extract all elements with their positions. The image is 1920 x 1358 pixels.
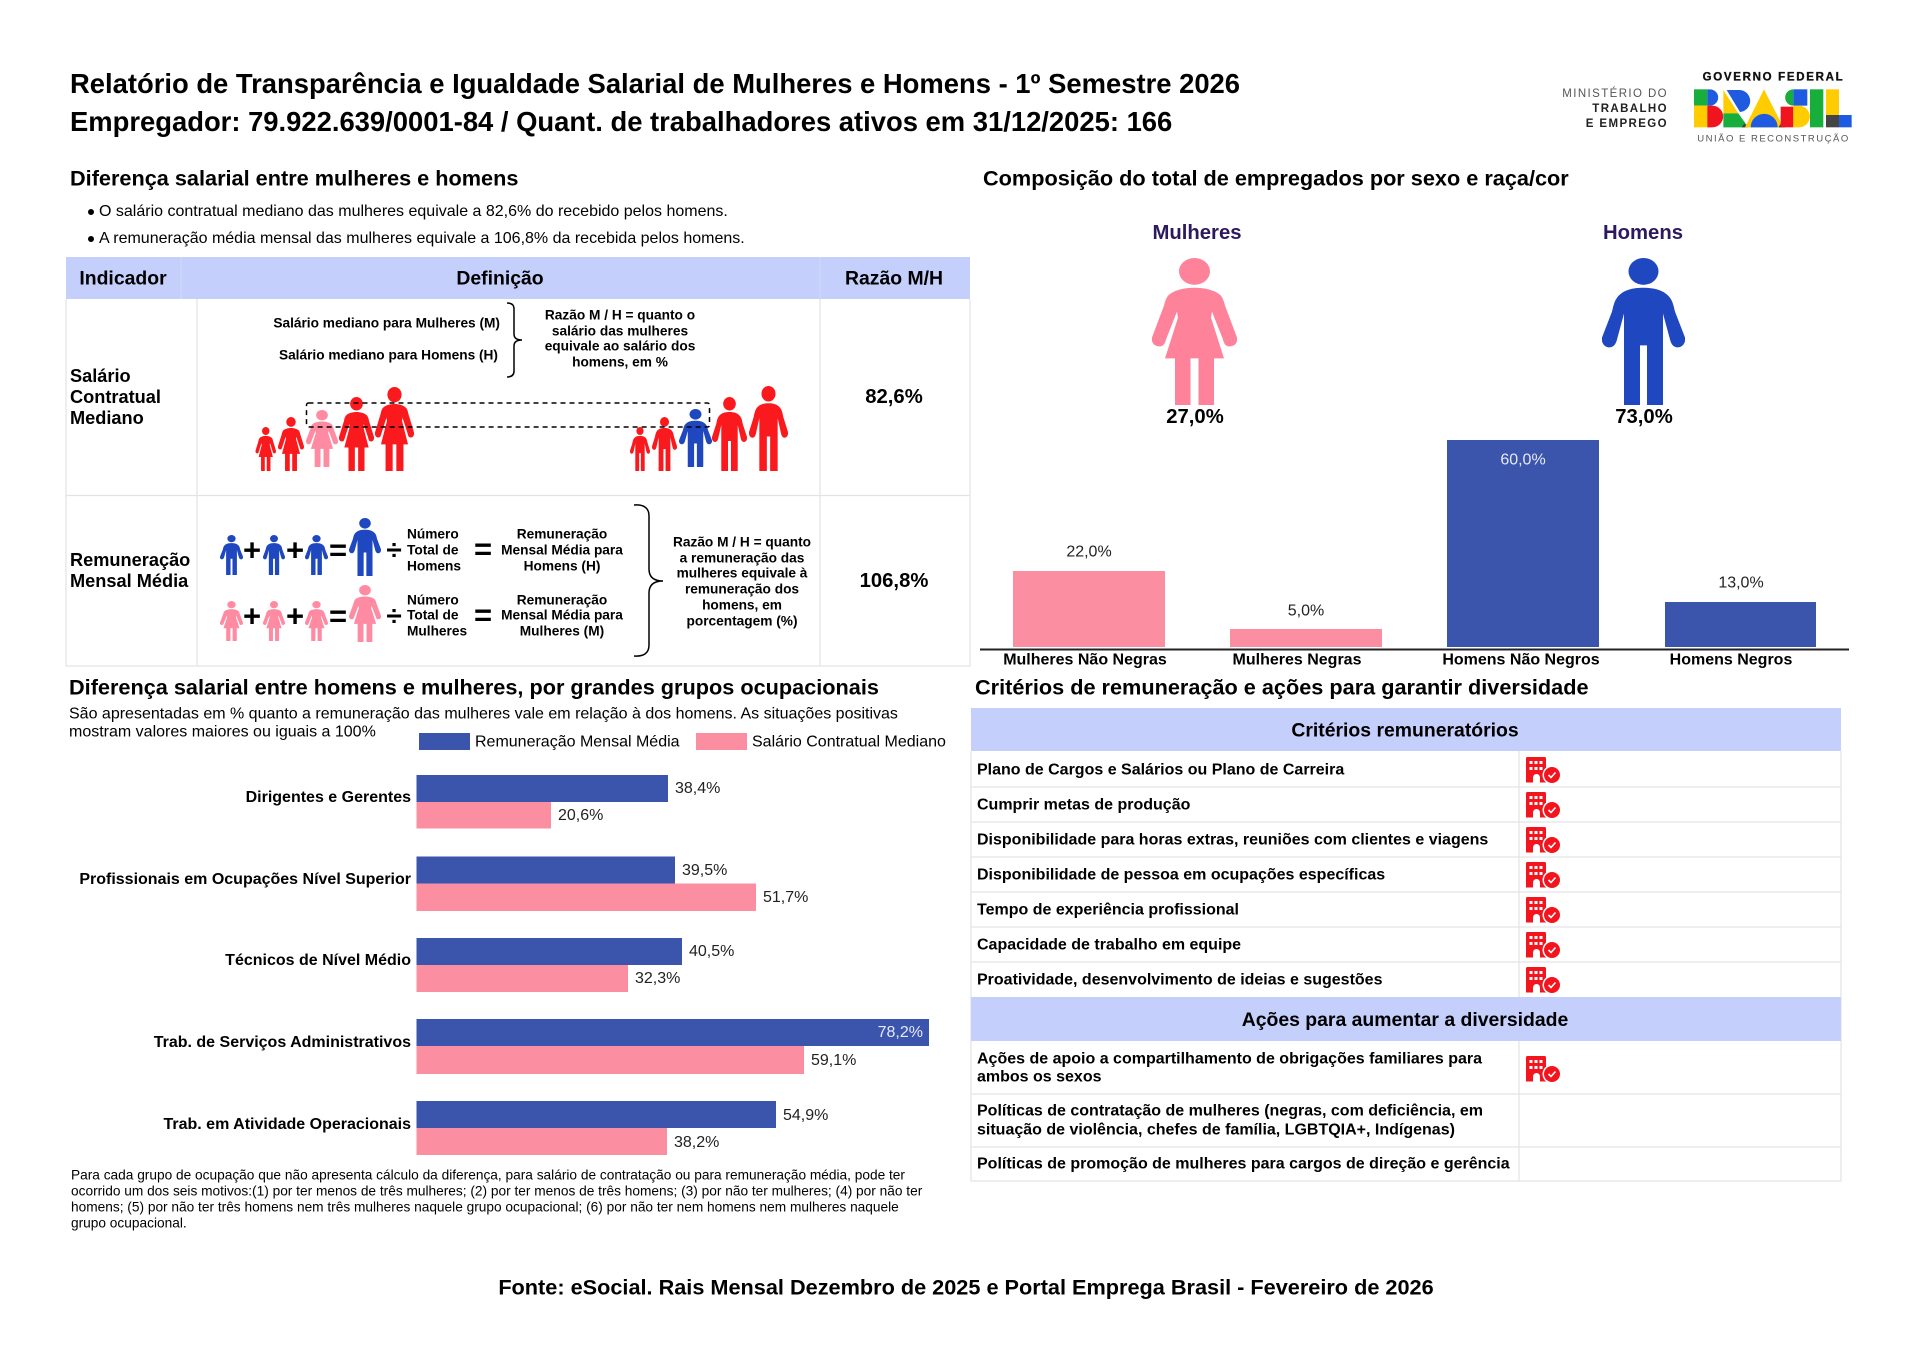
row: remuneração mensal média: Remuneração bbox=[517, 526, 607, 542]
row: salário contratual mediano: Salário mediano para Homens (H) bbox=[279, 348, 498, 362]
group: técnicos: 32,3% bbox=[635, 970, 680, 987]
title bbox=[70, 68, 1240, 137]
group: profissionais: 51,7% bbox=[763, 889, 808, 906]
bullet list: A remuneração média mensal das mulheres equivale a 106,8% da recebida pelos homens. bbox=[99, 230, 745, 247]
icon group: homens: 73,0% bbox=[1615, 406, 1673, 428]
row: remuneração mensal média: Mensal Média para bbox=[501, 608, 623, 622]
row: remuneração mensal média: ÷ bbox=[386, 534, 402, 566]
row: remuneração mensal média: Total de bbox=[407, 542, 459, 558]
row: salário contratual mediano bbox=[70, 303, 923, 471]
panel: tabela de indicadores bbox=[66, 257, 970, 666]
legend: Salário Contratual Mediano bbox=[752, 734, 946, 750]
row: remuneração mensal média: Número bbox=[407, 526, 459, 542]
bar chart: composição por sexo e raça: Mulheres Não Negras bbox=[1003, 652, 1167, 668]
icon group: homens: Homens bbox=[1603, 222, 1683, 244]
heading: diferença salarial: Diferença salarial entre mulheres e homens bbox=[70, 166, 518, 190]
ministry name bbox=[1562, 87, 1668, 130]
ministry name: E EMPREGO bbox=[1586, 118, 1668, 130]
bar chart: composição por sexo e raça: 60,0% bbox=[1500, 452, 1546, 468]
row: remuneração mensal média: Mulheres (M) bbox=[520, 624, 604, 638]
row: remuneração mensal média: mulheres equivale à bbox=[677, 566, 808, 580]
footnote: ocorrido um dos seis motivos:(1) por ter menos de três mulheres; (2) por ter menos de três homens; (3) por não ter mulheres; (4) por não ter bbox=[71, 1184, 923, 1198]
women row icons bbox=[255, 387, 414, 471]
bullet list: O salário contratual mediano das mulheres equivale a 82,6% do recebido pelos homens. bbox=[99, 203, 728, 220]
bar chart: composição por sexo e raça: Homens Não Negros bbox=[1442, 652, 1600, 668]
men row icons bbox=[630, 386, 788, 471]
row: remuneração mensal média: porcentagem (%) bbox=[686, 614, 798, 628]
legend bbox=[419, 733, 946, 750]
row: salário contratual mediano: Salário mediano para Mulheres (M) bbox=[273, 316, 500, 330]
row: Capacidade de trabalho em equipe bbox=[977, 936, 1241, 954]
heading: composição: Composição do total de empregados por sexo e raça/cor bbox=[983, 166, 1569, 190]
row bbox=[977, 1102, 1483, 1138]
group: atividade operacional: 54,9% bbox=[783, 1107, 828, 1124]
row bbox=[977, 1050, 1562, 1086]
row bbox=[977, 757, 1562, 784]
row: remuneração mensal média: + bbox=[286, 598, 304, 634]
bar chart: composição por sexo e raça: 22,0% bbox=[1066, 544, 1112, 560]
row bbox=[977, 897, 1562, 924]
row: remuneração mensal média bbox=[70, 505, 928, 656]
row bbox=[977, 967, 1562, 994]
row: remuneração mensal média: remuneração dos bbox=[685, 582, 799, 596]
section header: critérios remuneratórios bbox=[971, 708, 1841, 751]
row: remuneração mensal média: Remuneração bbox=[70, 550, 190, 570]
row: remuneração mensal média: Homens (H) bbox=[524, 558, 600, 574]
row: remuneração mensal média: = bbox=[474, 532, 492, 566]
table header: Definição bbox=[456, 268, 544, 290]
footnote: homens; (5) por não ter três homens nem três mulheres naquele grupo ocupacional; (6) por não ter nem homens nem mulheres naquele bbox=[71, 1200, 899, 1214]
icon group: mulheres: 27,0% bbox=[1166, 406, 1224, 428]
row bbox=[977, 792, 1562, 820]
group: técnicos: 40,5% bbox=[689, 943, 734, 960]
row bbox=[977, 932, 1562, 960]
heading: diferença por grupos ocupacionais: Diferença salarial entre homens e mulheres, por grandes grupos ocupacionais bbox=[69, 674, 879, 700]
row: remuneração mensal média: Mensal Média bbox=[70, 571, 189, 591]
footnote: grupo ocupacional. bbox=[71, 1216, 187, 1230]
row bbox=[977, 862, 1562, 890]
group: técnicos: Técnicos de Nível Médio bbox=[225, 952, 411, 969]
heading: critérios e ações: Critérios de remuneração e ações para garantir diversidade bbox=[975, 674, 1589, 700]
row: remuneração mensal média: homens, em bbox=[702, 598, 782, 612]
row: remuneração mensal média: + bbox=[243, 532, 261, 568]
group: profissionais: Profissionais em Ocupações Nível Superior bbox=[79, 871, 411, 888]
icon group: mulheres: Mulheres bbox=[1152, 222, 1242, 244]
row: Cumprir metas de produção bbox=[977, 796, 1191, 814]
icon group: homens bbox=[1602, 222, 1685, 428]
section header: ações: Ações para aumentar a diversidade bbox=[1242, 1009, 1568, 1031]
row: remuneração mensal média: Número bbox=[407, 592, 459, 608]
table header bbox=[66, 257, 970, 299]
group: dirigentes e gerentes: Dirigentes e Gerentes bbox=[246, 789, 411, 806]
bar chart: composição por sexo e raça: 13,0% bbox=[1718, 574, 1764, 592]
governo federal label: GOVERNO FEDERAL bbox=[1703, 72, 1844, 84]
row bbox=[977, 827, 1562, 854]
ministry name: MINISTÉRIO DO bbox=[1562, 87, 1668, 100]
row: salário contratual mediano: Contratual bbox=[70, 387, 161, 407]
row: Políticas de promoção de mulheres para cargos de direção e gerência bbox=[977, 1156, 1510, 1172]
row: Proatividade, desenvolvimento de ideias e sugestões bbox=[977, 972, 1383, 988]
row: salário contratual mediano: Mediano bbox=[70, 408, 144, 428]
title: Relatório de Transparência e Igualdade Salarial de Mulheres e Homens - 1º Semestre 2026 bbox=[70, 68, 1240, 99]
men formula bbox=[220, 518, 381, 576]
row: remuneração mensal média: 106,8% bbox=[860, 570, 928, 592]
row: remuneração mensal média: a remuneração das bbox=[680, 550, 805, 566]
intro text: São apresentadas em % quanto a remuneração das mulheres vale em relação à dos homens. As situações positivas bbox=[69, 706, 898, 722]
row: remuneração mensal média: Mulheres bbox=[407, 624, 467, 638]
row: Tempo de experiência profissional bbox=[977, 902, 1239, 918]
row: Políticas de contratação de mulheres (negras, com deficiência, em bbox=[977, 1102, 1483, 1120]
row: remuneração mensal média: + bbox=[286, 532, 304, 568]
group: atividade operacional: 38,2% bbox=[674, 1134, 719, 1151]
group: serviços administrativos: Trab. de Serviços Administrativos bbox=[154, 1034, 411, 1051]
row: remuneração mensal média: = bbox=[329, 598, 347, 634]
row: salário contratual mediano: Salário bbox=[70, 366, 131, 386]
brasil wordmark bbox=[1694, 89, 1852, 127]
panel: critérios e ações table bbox=[971, 708, 1841, 1181]
group: atividade operacional bbox=[164, 1101, 828, 1155]
row: situação de violência, chefes de família, LGBTQIA+, Indígenas) bbox=[977, 1122, 1455, 1138]
row: remuneração mensal média: Remuneração bbox=[517, 592, 607, 608]
row: remuneração mensal média: Razão M / H = quanto bbox=[673, 534, 811, 550]
row: Plano de Cargos e Salários ou Plano de Carreira bbox=[977, 762, 1344, 778]
bar chart: composição por sexo e raça: Mulheres Negras bbox=[1233, 652, 1362, 668]
row: remuneração mensal média: = bbox=[329, 532, 347, 568]
bar chart: composição por sexo e raça bbox=[980, 440, 1849, 668]
row: salário contratual mediano: salário das mulheres bbox=[552, 324, 688, 338]
row: Disponibilidade de pessoa em ocupações específicas bbox=[977, 866, 1385, 884]
ministry name: TRABALHO bbox=[1592, 103, 1668, 115]
group: técnicos bbox=[225, 938, 734, 992]
row: remuneração mensal média: Total de bbox=[407, 608, 459, 622]
legend: Remuneração Mensal Média bbox=[475, 734, 680, 750]
group: serviços administrativos bbox=[154, 1019, 929, 1074]
women formula bbox=[220, 585, 381, 642]
table header: Indicador bbox=[79, 268, 167, 290]
intro text bbox=[69, 706, 898, 740]
row: salário contratual mediano: 82,6% bbox=[865, 386, 923, 408]
row: salário contratual mediano: Razão M / H = quanto o bbox=[545, 308, 695, 322]
group: dirigentes e gerentes: 38,4% bbox=[675, 780, 720, 797]
source: Fonte: eSocial. Rais Mensal Dezembro de 2025 e Portal Emprega Brasil - Fevereiro de 2026 bbox=[498, 1274, 1434, 1300]
section header: critérios remuneratórios: Critérios remuneratórios bbox=[1291, 720, 1519, 742]
group: serviços administrativos: 59,1% bbox=[811, 1052, 856, 1069]
icon group: mulheres bbox=[1152, 222, 1242, 428]
row: remuneração mensal média: Mensal Média para bbox=[501, 542, 623, 558]
intro text: mostram valores maiores ou iguais a 100% bbox=[69, 724, 376, 740]
title: Empregador: 79.922.639/0001-84 / Quant. de trabalhadores ativos em 31/12/2025: 166 bbox=[70, 106, 1172, 137]
row: remuneração mensal média: ÷ bbox=[386, 600, 402, 632]
table header: Razão M/H bbox=[845, 268, 943, 290]
row: remuneração mensal média: + bbox=[243, 598, 261, 634]
group: dirigentes e gerentes: 20,6% bbox=[558, 807, 603, 824]
bar chart: grupos ocupacionais bbox=[79, 775, 929, 1155]
bar chart: composição por sexo e raça: 5,0% bbox=[1288, 602, 1324, 620]
group: profissionais: 39,5% bbox=[682, 862, 727, 879]
bullet list bbox=[88, 203, 745, 247]
row: salário contratual mediano: equivale ao salário dos bbox=[545, 338, 696, 354]
group: atividade operacional: Trab. em Atividade Operacionais bbox=[164, 1116, 411, 1133]
row: Disponibilidade para horas extras, reuniões com clientes e viagens bbox=[977, 832, 1488, 848]
group: profissionais bbox=[79, 856, 808, 911]
group: dirigentes e gerentes bbox=[246, 775, 720, 828]
row: ambos os sexos bbox=[977, 1068, 1102, 1086]
group: serviços administrativos: 78,2% bbox=[878, 1024, 923, 1041]
row: salário contratual mediano: homens, em % bbox=[572, 354, 668, 370]
bar chart: composição por sexo e raça: Homens Negros bbox=[1670, 652, 1792, 668]
logo: ministério e governo federal bbox=[1562, 72, 1852, 144]
footnote: Para cada grupo de ocupação que não apresenta cálculo da diferença, para salário de contratação ou para remuneração média, pode ter bbox=[71, 1168, 905, 1182]
row: remuneração mensal média: = bbox=[474, 598, 492, 632]
section header: ações bbox=[971, 997, 1841, 1041]
row: remuneração mensal média: Homens bbox=[407, 558, 461, 574]
footnote bbox=[71, 1168, 923, 1230]
união e reconstrução label: UNIÃO E RECONSTRUÇÃO bbox=[1697, 134, 1850, 144]
row: Ações de apoio a compartilhamento de obrigações familiares para bbox=[977, 1050, 1482, 1068]
